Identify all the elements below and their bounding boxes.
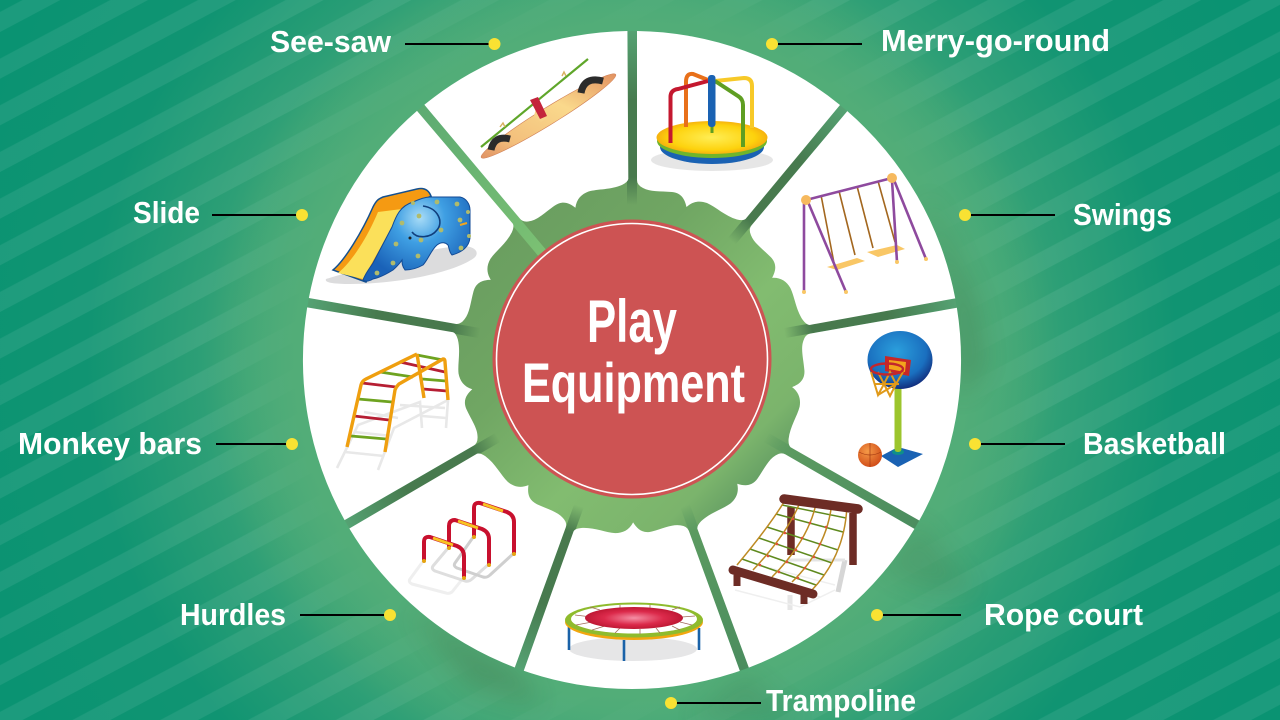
icon: swings	[801, 173, 928, 294]
panel: trampoline	[484, 493, 740, 720]
label: Swings: Swings	[1073, 197, 1172, 232]
panel: swings	[726, 111, 1003, 387]
label: Monkey bars: Monkey bars	[18, 426, 202, 461]
label: Merry-go-round: Merry-go-round	[881, 23, 1110, 58]
icon: hurdles	[409, 503, 516, 593]
icon: elephant slide	[326, 188, 477, 284]
title: Play: Play	[587, 288, 677, 355]
label: Swings	[959, 197, 1172, 232]
panel: merry-go-round	[637, 31, 840, 220]
label: See-saw: See-saw	[270, 24, 392, 59]
panel: rope court	[649, 434, 914, 705]
panel: slide	[309, 98, 530, 331]
label: Rope court	[871, 597, 1143, 632]
label: Merry-go-round	[766, 23, 1110, 58]
icon: see-saw	[477, 59, 620, 165]
icon: trampoline	[565, 602, 703, 661]
label: See-saw	[270, 24, 500, 59]
central gear backdrop	[446, 174, 818, 546]
panel: hurdles	[324, 420, 579, 667]
label: Slide	[133, 195, 308, 230]
label: Trampoline: Trampoline	[766, 683, 916, 718]
title: Equipment: Equipment	[522, 351, 745, 414]
panel: monkey bars	[243, 250, 508, 520]
panel: basketball	[771, 308, 992, 541]
soft wheel shadows	[410, 190, 985, 720]
radial dividers	[307, 31, 957, 671]
center circle	[492, 220, 772, 498]
label: Basketball	[969, 426, 1226, 461]
label: Rope court: Rope court	[984, 597, 1143, 632]
icon: merry-go-round	[651, 74, 773, 171]
label: Slide: Slide	[133, 195, 200, 230]
label: Monkey bars	[18, 426, 298, 461]
panel: see-saw	[424, 0, 701, 250]
icon: rope court	[733, 497, 858, 610]
label: Hurdles: Hurdles	[180, 597, 286, 632]
label: Basketball: Basketball	[1083, 426, 1226, 461]
label: Hurdles	[180, 597, 396, 632]
label: Trampoline	[665, 683, 916, 718]
icon: monkey bars	[337, 354, 448, 470]
icon: basketball hoop	[858, 331, 932, 467]
